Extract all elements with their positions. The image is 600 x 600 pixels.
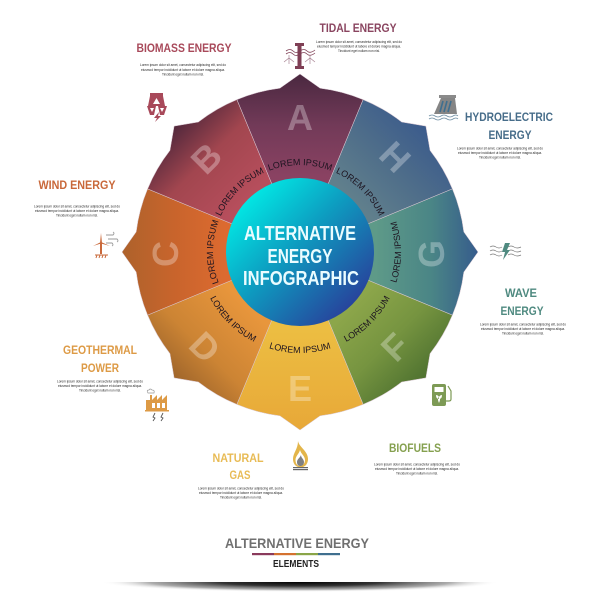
text block: geothermal power: Lorem ipsum dolor sit amet, consectetur adipiscing elit, sed do (57, 378, 144, 384)
text block: wave energy: Tincidunt eget nullam non nisi. (502, 330, 544, 336)
text block: tidal energy: Lorem ipsum dolor sit amet, consectetur adipiscing elit, sed do (316, 39, 403, 44)
text block: biofuels: BIOFUELS (389, 443, 441, 455)
text block: geothermal power (57, 345, 144, 392)
footer shadow (100, 582, 500, 592)
text block: geothermal power: POWER (81, 363, 120, 375)
letter A: A (287, 97, 313, 138)
text block: biofuels: eiusmod tempor incididunt ut labore et dolore magna aliqua. (375, 466, 459, 471)
text block: hydroelectric energy: eiusmod tempor incididunt ut labore et dolore magna aliqua. (458, 150, 542, 155)
text block: tidal energy (316, 23, 403, 53)
icon: wave energy bolt (490, 243, 521, 260)
icon: tidal turbine (284, 43, 315, 69)
text block: biomass energy: Lorem ipsum dolor sit amet, consectetur adipiscing elit, sed do (140, 62, 227, 67)
label G: LOREM IPSUM (390, 222, 402, 282)
text block: natural gas: eiusmod tempor incididunt ut labore et dolore magna aliqua. (199, 490, 283, 495)
label H: LOREM IPSUM (336, 168, 384, 216)
icon: biofuel pump (432, 384, 451, 406)
text block: natural gas: GAS (230, 470, 251, 482)
text block: wave energy: Lorem ipsum dolor sit amet, consectetur adipiscing elit, sed do (480, 322, 567, 326)
letter H: H (371, 133, 419, 181)
center title line 1: ALTERNATIVE (244, 223, 356, 245)
text block: wind energy: Tincidunt eget nullam non nisi. (56, 212, 98, 218)
text block: wind energy: eiusmod tempor incididunt ut labore et dolore magna aliqua. (35, 208, 119, 213)
segment E (237, 252, 363, 430)
footer title (225, 535, 370, 570)
footer subtitle: ELEMENTS (273, 559, 319, 570)
text block: biomass energy (136, 43, 232, 76)
label B: LOREM IPSUM (215, 167, 264, 216)
text block: tidal energy: Tincidunt eget nullam non nisi. (338, 48, 380, 53)
text block: geothermal power: GEOTHERMAL (63, 345, 137, 357)
letter F: F (373, 325, 417, 369)
segment C (122, 189, 300, 315)
label A: LOREM IPSUM (268, 158, 332, 170)
text block: natural gas: NATURAL (212, 453, 264, 465)
text block: geothermal power: eiusmod tempor incididunt ut labore et dolore magna aliqua. (58, 383, 142, 388)
icon: natural gas flame (293, 441, 308, 470)
label F: LOREM IPSUM (344, 296, 390, 342)
text block: biomass energy: eiusmod tempor incididunt ut labore et dolore magna aliqua. (141, 67, 225, 72)
text block: hydroelectric energy (457, 112, 553, 160)
footer title: ALTERNATIVE ENERGY (225, 535, 370, 551)
wheel of eight energy segments (122, 74, 478, 430)
letter B: B (183, 135, 230, 182)
text block: wind energy: WIND ENERGY (38, 180, 116, 192)
text block: wave energy: ENERGY (500, 306, 544, 318)
text block: biofuels (374, 443, 461, 476)
segment A (237, 74, 363, 252)
text block: wave energy: eiusmod tempor incididunt ut labore et dolore magna aliqua. (481, 326, 565, 331)
text block: geothermal power: Tincidunt eget nullam non nisi. (79, 388, 121, 392)
text block: biomass energy: Tincidunt eget nullam non nisi. (162, 72, 204, 76)
icon: biomass plant (147, 93, 167, 122)
text block: wind energy (34, 180, 121, 218)
segment G (300, 189, 478, 315)
text block: natural gas (198, 453, 285, 500)
icon: hydroelectric dam (429, 95, 458, 120)
letter E: E (288, 368, 312, 409)
text block: wave energy: WAVE (505, 288, 537, 300)
segment B (130, 82, 345, 297)
text block: hydroelectric energy: HYDROELECTRIC (465, 112, 553, 124)
text block: hydroelectric energy: Tincidunt eget nullam non nisi. (479, 154, 521, 160)
text block: natural gas: Lorem ipsum dolor sit amet, consectetur adipiscing elit, sed do (198, 486, 285, 490)
letter D: D (181, 323, 229, 371)
segment H (255, 82, 470, 297)
label E: LOREM IPSUM (270, 342, 330, 354)
letter G: G (411, 240, 452, 268)
text block: biomass energy: BIOMASS ENERGY (136, 43, 232, 55)
text block: tidal energy: eiusmod tempor incididunt ut labore et dolore magna aliqua. (317, 44, 401, 48)
label C: LOREM IPSUM (206, 220, 218, 284)
center title line 3: INFOGRAPHIC (243, 268, 359, 290)
text block: natural gas: Tincidunt eget nullam non nisi. (220, 494, 262, 500)
segment D (130, 207, 345, 422)
text block: tidal energy: TIDAL ENERGY (320, 23, 397, 35)
footer colour bar (252, 553, 340, 555)
icon: wind turbine (93, 232, 118, 258)
text block: wind energy: Lorem ipsum dolor sit amet, consectetur adipiscing elit, sed do (34, 204, 121, 208)
curved segment labels (206, 158, 402, 354)
text block: hydroelectric energy: ENERGY (488, 130, 532, 142)
segment letters (145, 97, 452, 409)
text block: hydroelectric energy: Lorem ipsum dolor sit amet, consectetur adipiscing elit, sed do (457, 146, 544, 150)
label D: LOREM IPSUM (210, 296, 256, 342)
center circle with title (226, 178, 374, 326)
icon: geothermal factory (145, 389, 169, 421)
letter C: C (145, 241, 186, 267)
center title line 2: ENERGY (268, 246, 333, 268)
text block: biofuels: Lorem ipsum dolor sit amet, consectetur adipiscing elit, sed do (374, 462, 461, 466)
text block: wave energy (480, 288, 567, 336)
text block: biofuels: Tincidunt eget nullam non nisi. (396, 470, 438, 476)
segment F (255, 207, 470, 422)
